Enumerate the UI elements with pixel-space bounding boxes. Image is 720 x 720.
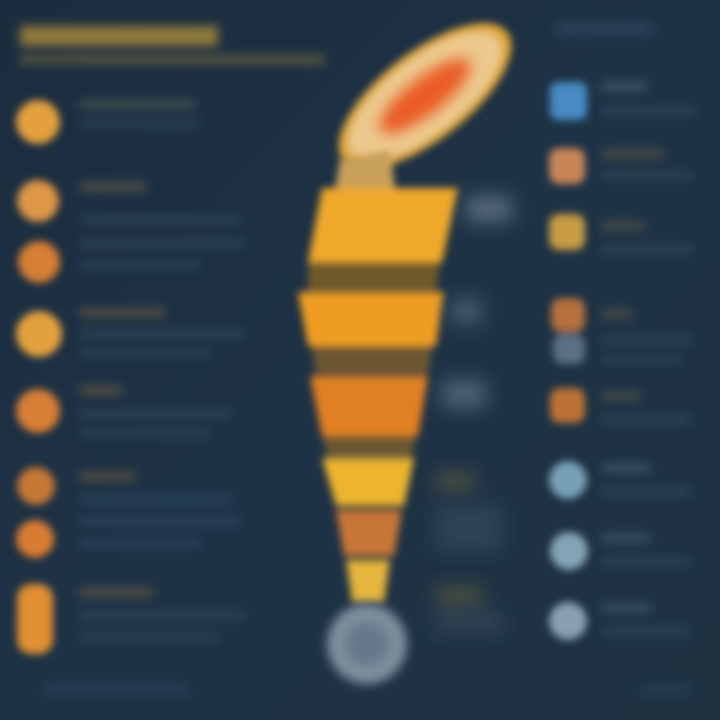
- icon: right 5: [553, 334, 585, 364]
- text block: right 1: [602, 82, 694, 115]
- icon: left 6: [17, 467, 55, 505]
- segment 4: [322, 458, 414, 506]
- text block: left 4: [80, 386, 230, 436]
- right column text: [602, 82, 694, 635]
- icon: left 2: [17, 180, 59, 222]
- icon: right 8: [550, 532, 588, 570]
- chart: stacked funnel: [298, 150, 458, 602]
- left column text: [44, 100, 690, 694]
- icon: right 7: [549, 461, 587, 499]
- icon: right 1: [550, 82, 587, 120]
- text block: left 1: [80, 100, 200, 127]
- icon: left 1: [16, 100, 60, 144]
- right column heading: [556, 22, 652, 36]
- text block: right 3: [602, 222, 692, 253]
- icon: right 6: [550, 388, 585, 423]
- icon: right 3: [549, 214, 585, 250]
- title: [20, 26, 324, 64]
- icon: right 2: [549, 148, 585, 184]
- icon: left 3: [18, 241, 60, 283]
- segment 2: [298, 292, 444, 346]
- text block: right 5: [602, 392, 690, 423]
- footer: [44, 684, 690, 694]
- label: segment 4: [436, 474, 502, 551]
- text block: right 2: [602, 150, 692, 179]
- gap 2: [312, 346, 432, 374]
- icon: left 4: [16, 311, 62, 357]
- text block: right 4: [602, 310, 692, 362]
- label: segment 1: [466, 196, 512, 222]
- segment 3: [310, 376, 428, 436]
- icon: left 7: [16, 520, 54, 558]
- gap 1: [308, 262, 440, 290]
- icon: right 9: [549, 602, 587, 640]
- text block: right 6: [602, 464, 690, 495]
- text block: left 6: [80, 588, 245, 640]
- label: segment 3: [442, 380, 486, 408]
- segment 6: [346, 560, 390, 602]
- left column icons: [16, 100, 62, 654]
- text block: left 3: [80, 308, 245, 356]
- funnel tail: ellipse flame: [316, 0, 534, 195]
- label: segment 2: [450, 298, 482, 324]
- segment 5: [336, 510, 402, 556]
- label: segment 6: [436, 588, 502, 632]
- text block: right 7: [602, 534, 690, 565]
- center labels: [436, 196, 512, 632]
- text block: left 2: [80, 182, 245, 268]
- icon: right 4: [551, 298, 585, 332]
- segment 1: [308, 188, 458, 262]
- icon: left 8: [17, 584, 53, 654]
- gap 3: [322, 436, 416, 456]
- icon: left 5: [16, 389, 60, 433]
- text block: left 5: [80, 472, 240, 546]
- text block: right 8: [602, 604, 690, 635]
- funnel neck: [335, 150, 395, 190]
- icon: gear at funnel base: [327, 604, 407, 684]
- right column icons: [549, 82, 588, 640]
